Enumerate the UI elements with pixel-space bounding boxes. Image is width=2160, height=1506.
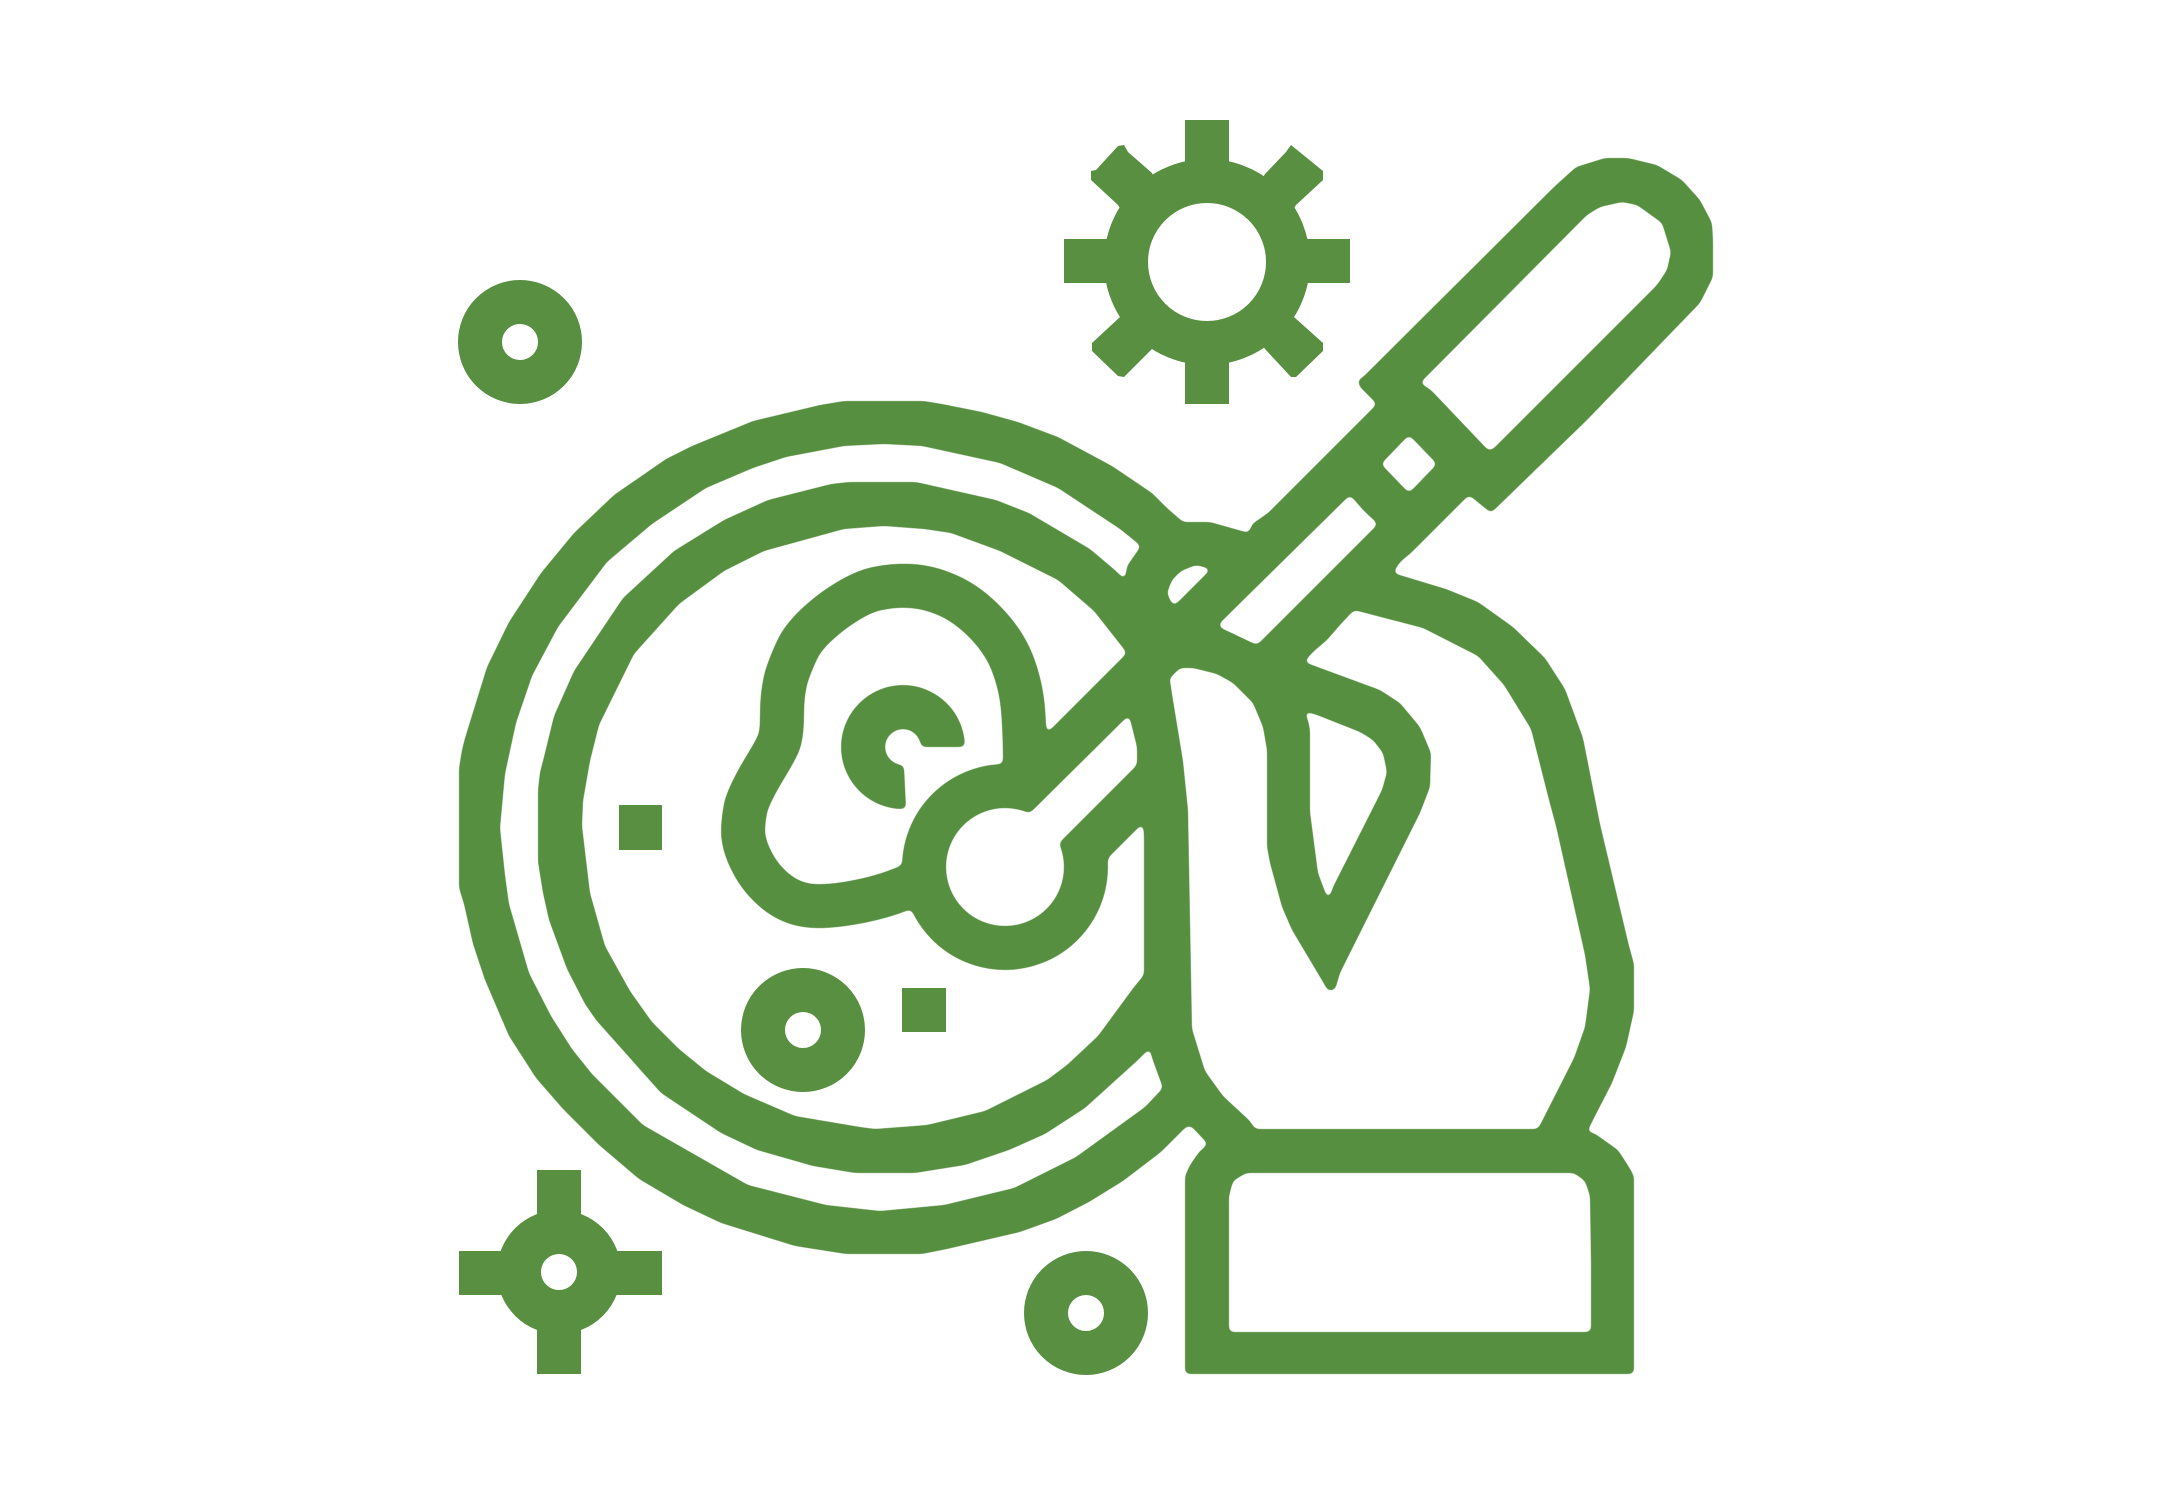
- ring: inside dish: [763, 990, 843, 1070]
- gap between dish rings: [500, 444, 1163, 1211]
- base cuff opening: [1229, 1173, 1591, 1332]
- palm and fingers interior: [1168, 610, 1590, 1129]
- inner spiral hook: [863, 707, 943, 787]
- screwdriver handle opening: [1420, 202, 1671, 451]
- ring: bottom centre: [1046, 1273, 1126, 1353]
- square dot: lower: [902, 988, 946, 1032]
- tool shaft bands: [1000, 653, 1146, 900]
- spiral stroke inside dish: [743, 586, 1025, 906]
- ring: top left: [480, 302, 560, 382]
- finger interior: [1304, 711, 1387, 899]
- silhouette: outer dish ring, hand, screwdriver and base: [459, 158, 1713, 1374]
- cross ring: bottom left: [459, 1170, 662, 1374]
- screwdriver collar window: [1381, 435, 1437, 493]
- gear: [1064, 120, 1350, 404]
- tool shaft channel: [1010, 715, 1137, 860]
- square dot: left: [619, 805, 662, 850]
- small opening near tool shaft: [1167, 565, 1211, 606]
- dish interior: [582, 526, 1144, 1129]
- tool tip ring: [924, 786, 1086, 948]
- screwdriver shaft window: [1219, 495, 1378, 645]
